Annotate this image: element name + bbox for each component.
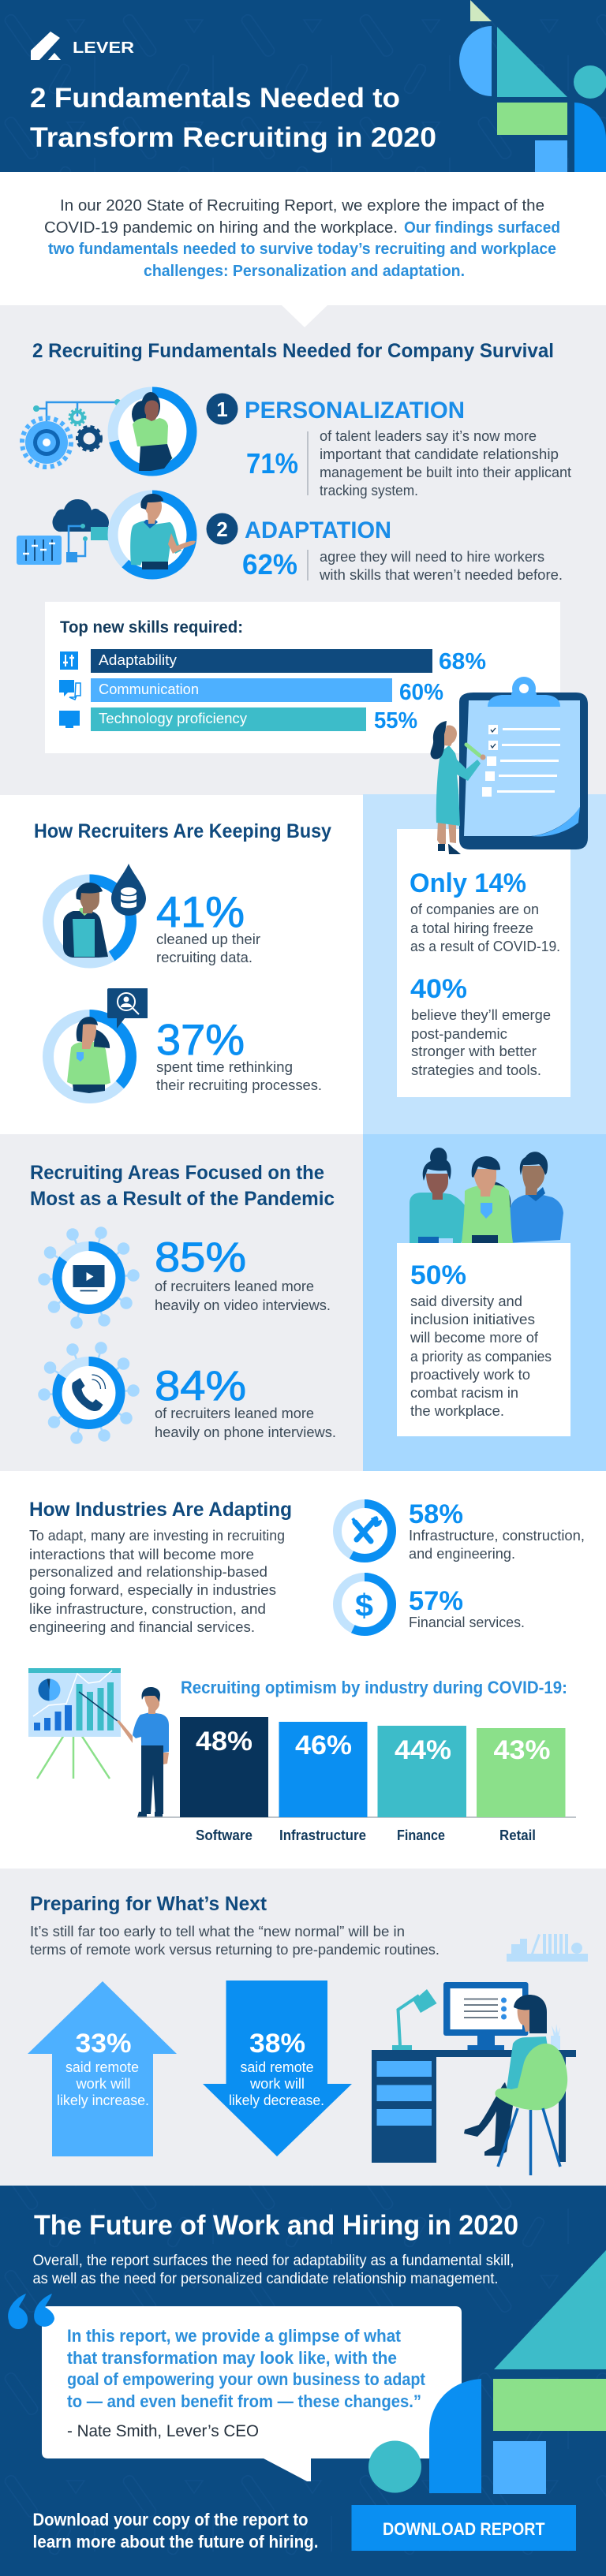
icon: presentation easel bbox=[28, 1668, 121, 1779]
text block: phone interviews: of recruiters leaned more bbox=[155, 1406, 314, 1421]
heading: how recruiters are keeping busy: How Recruiters Are Keeping Busy bbox=[34, 820, 331, 842]
bar: communication bbox=[59, 678, 443, 705]
icon: woman at desk bbox=[372, 1982, 576, 2175]
man right bbox=[508, 1152, 563, 1243]
text block: infrastructure: Infrastructure, construction, bbox=[409, 1528, 585, 1544]
icon: three people bbox=[410, 1148, 563, 1243]
number badge 1: 1 bbox=[216, 398, 228, 421]
footer summary: as well as the need for personalized candidate relationship management. bbox=[33, 2271, 499, 2287]
number badge 2: 2 bbox=[216, 517, 228, 541]
heading: recruiting areas: Most as a Result of the Pandemic bbox=[30, 1188, 335, 1210]
footer summary: Overall, the report surfaces the need for adaptability as a fundamental skill, bbox=[33, 2253, 514, 2269]
stat only 14%: Only 14% bbox=[410, 868, 526, 898]
text block: rethinking: spent time rethinking bbox=[156, 1059, 293, 1075]
intro text: Our findings surfaced bbox=[404, 219, 560, 237]
text block: industries paragraph bbox=[29, 1528, 285, 1635]
text block: emerge stronger: stronger with better bbox=[411, 1043, 537, 1059]
text block: hiring freeze: as a result of COVID-19. bbox=[410, 939, 560, 954]
panel: diversity stat: inclusion initiatives bbox=[410, 1312, 535, 1327]
chair bbox=[495, 2044, 567, 2110]
heading: how industries are adapting: How Industries Are Adapting bbox=[29, 1499, 292, 1521]
arrow: up 33% bbox=[28, 1981, 177, 2156]
text block: industries paragraph: interactions that will become more bbox=[29, 1547, 254, 1562]
arrow: down 38% bbox=[203, 1981, 352, 2156]
quote text: to — and even benefit from — these changes.” bbox=[67, 2391, 421, 2411]
text block: infrastructure bbox=[409, 1528, 585, 1562]
icon: bookshelf bbox=[507, 1934, 588, 1962]
bar: technology proficiency bbox=[59, 707, 417, 734]
stat 62%: 62% bbox=[242, 548, 297, 581]
logo wordmark: LEVER bbox=[73, 39, 135, 57]
text block: industries paragraph: To adapt, many are investing in recruiting bbox=[29, 1528, 285, 1544]
intro text: COVID-19 pandemic on hiring and the workplace. bbox=[44, 219, 398, 237]
text block: 71% description: of talent leaders say it’s now more bbox=[320, 428, 537, 444]
panel: diversity stat: 50% bbox=[410, 1260, 466, 1290]
bar: adaptability: 68% bbox=[439, 649, 486, 674]
text block: 71% description: management be built into their applicant bbox=[320, 465, 571, 480]
quote text: that transformation may look like, with the bbox=[67, 2348, 397, 2368]
panel: header bbox=[0, 0, 606, 172]
arrow: up 33%: said remote bbox=[65, 2059, 139, 2075]
quote text: In this report, we provide a glimpse of what bbox=[67, 2326, 402, 2346]
heading: recruiting areas: Recruiting Areas Focused on the bbox=[30, 1162, 324, 1184]
stat 37%: 37% bbox=[156, 1015, 245, 1064]
intro text: two fundamentals needed to survive today’s recruiting and workplace bbox=[48, 241, 556, 258]
text block: 62% description: with skills that weren’t needed before. bbox=[319, 567, 563, 583]
icon: phone ring bbox=[39, 1342, 139, 1443]
download button bbox=[352, 2505, 576, 2551]
panel: diversity stat: combat racism in bbox=[410, 1385, 518, 1401]
text block: 71% description bbox=[308, 428, 571, 498]
bar: adaptability bbox=[60, 649, 486, 674]
bar chart: optimism by industry bbox=[137, 1717, 576, 1843]
woman left bbox=[410, 1148, 472, 1243]
text block: infrastructure: and engineering. bbox=[409, 1546, 515, 1562]
text block: 62% description bbox=[308, 549, 563, 583]
title: 2 Fundamentals Needed to bbox=[30, 83, 400, 114]
lamp bbox=[392, 1989, 437, 2050]
bar: software: Software bbox=[196, 1827, 252, 1843]
bar: infrastructure: Infrastructure bbox=[279, 1827, 366, 1843]
text block: new normal: It’s still far too early to tell what the “new normal” will be in bbox=[30, 1924, 405, 1939]
heading: preparing for what's next: Preparing for What’s Next bbox=[30, 1893, 267, 1915]
quote bubble bbox=[8, 2294, 462, 2481]
text block: cleaned up bbox=[156, 931, 260, 965]
bar: infrastructure bbox=[279, 1722, 368, 1843]
adaptation label: ADAPTATION bbox=[245, 517, 391, 543]
footer summary bbox=[33, 2253, 514, 2287]
text block: cleaned up: cleaned up their bbox=[156, 931, 260, 947]
text block: hiring freeze: of companies are on bbox=[410, 902, 539, 917]
panel: diversity stat: the workplace. bbox=[410, 1403, 504, 1419]
bar: infrastructure: 46% bbox=[295, 1730, 352, 1760]
panel: top new skills bbox=[45, 602, 560, 753]
stat 40%: 40% bbox=[410, 974, 467, 1004]
text block: emerge stronger: believe they’ll emerge bbox=[411, 1007, 551, 1023]
stat 84%: 84% bbox=[155, 1363, 246, 1409]
panel: diversity stat: a priority as companies bbox=[410, 1349, 552, 1365]
woman middle bbox=[462, 1156, 513, 1243]
text block: emerge stronger: strategies and tools. bbox=[411, 1062, 541, 1078]
heading: recruiting areas bbox=[30, 1162, 335, 1210]
arrow: down 38%: work will bbox=[249, 2076, 305, 2092]
text block: rethinking: their recruiting processes. bbox=[156, 1077, 322, 1093]
text block: video interviews: heavily on video interviews. bbox=[155, 1297, 331, 1313]
text block: 71% description: important that candidate relationship bbox=[320, 446, 559, 462]
number badge 2 bbox=[207, 513, 238, 544]
bar: software: 48% bbox=[196, 1727, 252, 1757]
quote text: goal of empowering your own business to adapt bbox=[67, 2369, 426, 2389]
icon: video ring bbox=[39, 1227, 139, 1328]
stat 58%: 58% bbox=[409, 1499, 463, 1529]
bar: finance bbox=[377, 1726, 466, 1843]
quote text bbox=[67, 2326, 426, 2411]
arrow: up 33%: 33% bbox=[76, 2029, 131, 2059]
number badge 1 bbox=[207, 393, 238, 424]
text block: 62% description: agree they will need to hire workers bbox=[320, 549, 544, 565]
icon: cloud and control panel bbox=[17, 499, 112, 565]
icon: ring and man bbox=[113, 494, 196, 574]
bar: retail bbox=[477, 1728, 565, 1843]
text block: industries paragraph: going forward, especially in industries bbox=[29, 1582, 276, 1598]
arrow: down 38%: 38% bbox=[249, 2029, 305, 2059]
heading: recruiting optimism: Recruiting optimism by industry during COVID-19: bbox=[181, 1678, 567, 1697]
text block: video interviews bbox=[155, 1279, 331, 1313]
call to action text: learn more about the future of hiring. bbox=[33, 2532, 319, 2552]
stat 71%: 71% bbox=[246, 447, 298, 480]
intro text: In our 2020 State of Recruiting Report, we explore the impact of the bbox=[60, 197, 544, 215]
text block: financial services: Financial services. bbox=[409, 1615, 525, 1630]
text block: rethinking bbox=[156, 1059, 322, 1093]
arrow: up 33%: likely increase. bbox=[57, 2093, 149, 2108]
icon: quote marks bbox=[8, 2294, 54, 2329]
footer heading: The Future of Work and Hiring in 2020 bbox=[34, 2210, 518, 2241]
bar: retail: 43% bbox=[494, 1735, 551, 1765]
bar: communication: Communication bbox=[99, 681, 199, 697]
icon: clipboard and woman bbox=[431, 677, 588, 854]
bar: software bbox=[180, 1717, 268, 1843]
geometric shapes bbox=[493, 2250, 606, 2431]
bar: retail: Retail bbox=[499, 1827, 536, 1843]
panel: diversity stat: will become more of bbox=[410, 1330, 539, 1346]
panel: footer bbox=[0, 2186, 606, 2576]
lower geometric shapes bbox=[368, 2379, 546, 2494]
download button: DOWNLOAD REPORT bbox=[383, 2519, 545, 2539]
icon: dollar ring: $ bbox=[355, 1589, 373, 1623]
text block: new normal: terms of remote work versus returning to pre-pandemic routines. bbox=[30, 1942, 440, 1958]
icon: ring and man with database bbox=[48, 864, 146, 962]
bar: technology proficiency: 55% bbox=[374, 708, 417, 734]
icon: ring and woman bbox=[113, 392, 192, 471]
arrow: down 38%: likely decrease. bbox=[229, 2093, 324, 2108]
header geometric shapes bbox=[459, 0, 606, 172]
text block: industries paragraph: engineering and financial services. bbox=[29, 1619, 255, 1635]
bar: finance: Finance bbox=[397, 1827, 445, 1843]
bar: finance: 44% bbox=[395, 1735, 451, 1765]
arrow: up 33%: work will bbox=[75, 2076, 131, 2092]
text block: new normal bbox=[30, 1924, 440, 1958]
panel: diversity stat: said diversity and bbox=[410, 1294, 522, 1309]
call to action text bbox=[33, 2510, 319, 2552]
icon: gears and connectors bbox=[22, 399, 121, 467]
heading: recruiting fundamentals: 2 Recruiting Fundamentals Needed for Company Survival bbox=[32, 340, 554, 362]
text block: emerge stronger: post-pandemic bbox=[411, 1026, 507, 1042]
text block: hiring freeze bbox=[410, 902, 560, 954]
stat 41%: 41% bbox=[156, 887, 245, 936]
icon: dollar ring bbox=[338, 1577, 391, 1631]
panel: diversity stat: proactively work to bbox=[410, 1367, 530, 1383]
panel: recruiter side stats bbox=[397, 829, 570, 1097]
text block: industries paragraph: personalized and relationship-based bbox=[29, 1564, 267, 1580]
icon: lever logo bbox=[31, 32, 61, 60]
skills heading: Top new skills required: bbox=[60, 618, 243, 637]
arrow: down 38%: said remote bbox=[240, 2059, 314, 2075]
text block: phone interviews bbox=[155, 1406, 336, 1440]
call to action text: Download your copy of the report to bbox=[33, 2510, 308, 2529]
personalization label: PERSONALIZATION bbox=[245, 398, 465, 424]
intro text bbox=[44, 197, 560, 280]
panel: diversity stat bbox=[397, 1243, 570, 1436]
text block: 71% description: tracking system. bbox=[320, 483, 418, 498]
desk bbox=[372, 2050, 576, 2163]
title: Transform Recruiting in 2020 bbox=[30, 122, 436, 153]
text block: emerge stronger bbox=[411, 1007, 551, 1078]
bar: technology proficiency: Technology proficiency bbox=[99, 711, 247, 726]
stat 85%: 85% bbox=[155, 1234, 246, 1281]
woman bbox=[464, 1995, 567, 2175]
text block: video interviews: of recruiters leaned more bbox=[155, 1279, 314, 1294]
bar: communication: 60% bbox=[399, 680, 443, 705]
text block: industries paragraph: like infrastructure, construction, and bbox=[29, 1601, 266, 1617]
icon: man presenting bbox=[79, 1687, 169, 1817]
title bbox=[30, 83, 436, 153]
quote attribution: - Nate Smith, Lever’s CEO bbox=[67, 2422, 259, 2440]
icon: ring and woman with search bubble bbox=[48, 988, 148, 1098]
intro text: challenges: Personalization and adaptation. bbox=[144, 263, 465, 280]
text block: hiring freeze: a total hiring freeze bbox=[410, 920, 533, 936]
icon: tools ring bbox=[338, 1503, 391, 1559]
text block: phone interviews: heavily on phone interviews. bbox=[155, 1424, 336, 1440]
monitor bbox=[443, 1982, 529, 2050]
plant bbox=[551, 2024, 560, 2050]
stat 57%: 57% bbox=[409, 1586, 463, 1616]
text block: cleaned up: recruiting data. bbox=[156, 950, 252, 965]
bar: adaptability: Adaptability bbox=[99, 652, 177, 668]
